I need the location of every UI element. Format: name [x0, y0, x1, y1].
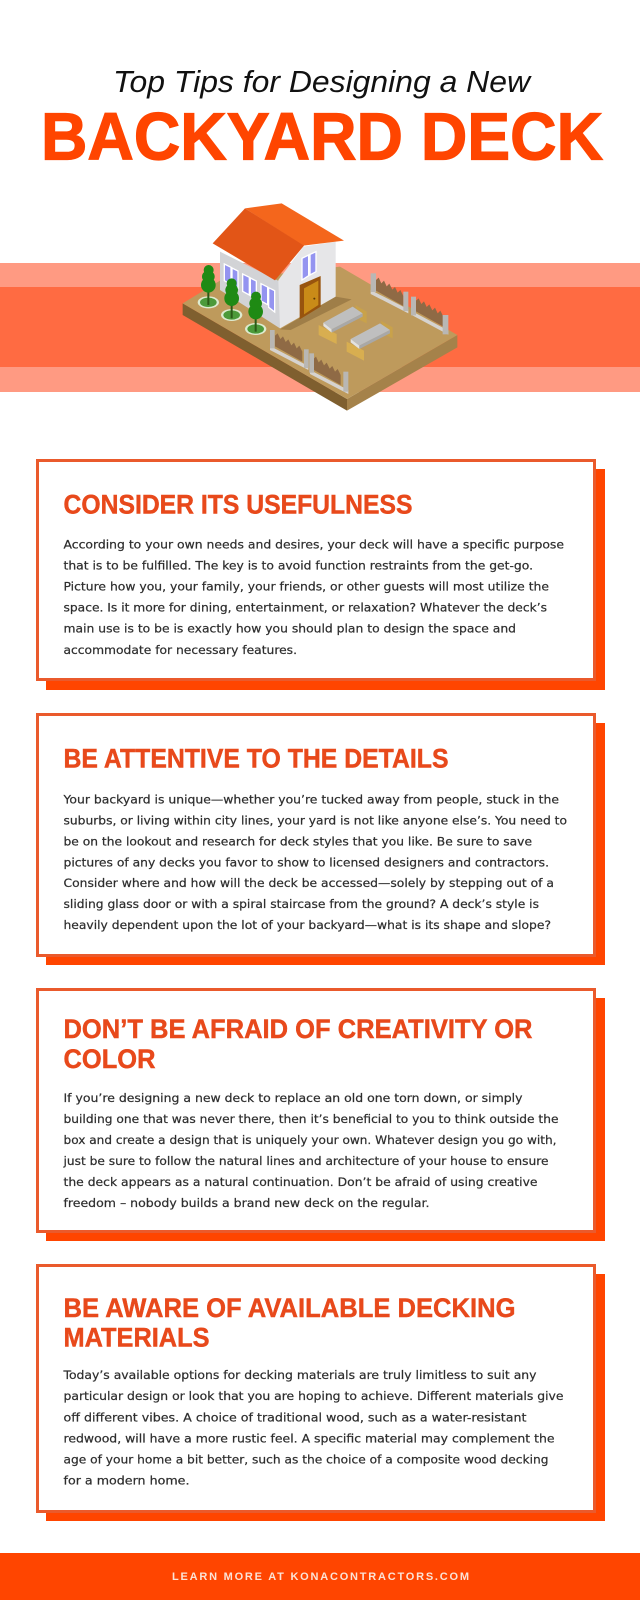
body text: the deck appears as a natural continuation. Don’t be afraid of using creative: [64, 1175, 538, 1189]
body text: [62, 1368, 563, 1488]
panel: be aware of available decking materials: [38, 1266, 605, 1521]
bench tables: [319, 305, 393, 361]
body text: [62, 1091, 558, 1210]
body text: heavily dependent upon the lot of your backyard—what is its shape and slope?: [64, 918, 551, 932]
band: dark stripe: [0, 287, 640, 367]
body text: According to your own needs and desires, your deck will have a specific purpose: [64, 538, 564, 552]
body text: If you’re designing a new deck to replace an old one torn down, or simply: [64, 1091, 523, 1105]
trees: [201, 265, 263, 332]
heading: CONSIDER ITS USEFULNESS: [64, 490, 412, 520]
body text: freedom – nobody builds a brand new deck on the regular.: [64, 1196, 430, 1210]
body text: suburbs, or living within city lines, your yard is not like anyone else’s. You need to: [64, 814, 567, 828]
platform: [183, 267, 457, 411]
main title: BACKYARD DECK: [41, 100, 603, 174]
card box: [38, 714, 594, 956]
body text: sliding glass door or with a spiral staircase from the ground? A deck’s style is: [64, 897, 539, 911]
body text: Picture how you, your family, your friends, or other guests will most utilize the: [64, 580, 549, 594]
body text: space. Is it more for dining, entertainment, or relaxation? Whatever the deck’s: [64, 600, 547, 614]
panel: don't be afraid of creativity or color: [38, 990, 605, 1241]
body text: that is to be fulfilled. The key is to avoid function restraints from the get-go.: [64, 558, 533, 572]
roof: [245, 203, 344, 246]
body text: accommodate for necessary features.: [64, 643, 297, 657]
title: [41, 64, 603, 174]
card box: [38, 990, 594, 1232]
body text: just be sure to follow the natural lines and architecture of your house to ensure: [62, 1154, 548, 1168]
fence: back: [371, 273, 448, 335]
card shadow: [46, 1274, 605, 1521]
heading: BE ATTENTIVE TO THE DETAILS: [64, 744, 448, 774]
body text: [62, 792, 567, 932]
body text: age of your home a bit better, such as the choice of a composite wood decking: [64, 1452, 548, 1466]
body text: [64, 538, 564, 657]
body text: redwood, will have a more rustic feel. A specific material may complement the: [64, 1432, 554, 1446]
footer band: [0, 1553, 640, 1600]
body text: box and create a design that is uniquely your own. Whatever design you go with,: [64, 1133, 556, 1147]
body text: Today’s available options for decking materials are truly limitless to suit any: [62, 1368, 537, 1382]
panel: consider its usefulness: [38, 460, 605, 690]
footer: [0, 1553, 640, 1600]
body text: for a modern home.: [64, 1474, 190, 1488]
door: [300, 276, 321, 319]
body text: main use is to be is exactly how you should plan to design the space and: [64, 622, 516, 636]
card shadow: [46, 723, 605, 965]
band: light stripe: [0, 263, 640, 392]
subtitle: Top Tips for Designing a New: [113, 64, 533, 99]
body text: off different vibes. A choice of traditional wood, such as a water-resistant: [64, 1410, 527, 1424]
card box: [38, 460, 594, 680]
heading: [64, 1293, 516, 1352]
heading: BE AWARE OF AVAILABLE DECKING: [64, 1293, 516, 1323]
fence: front: [270, 330, 348, 394]
body text: Consider where and how will the deck be accessed—solely by stepping out of a: [64, 876, 554, 890]
panel: be attentive to the details: [38, 714, 605, 965]
body text: building one that was never there, then it’s beneficial to you to think outside the: [64, 1112, 558, 1126]
house: [213, 203, 344, 328]
card box: [38, 1266, 594, 1512]
heading: DON’T BE AFRAID OF CREATIVITY OR: [64, 1014, 532, 1044]
heading: COLOR: [64, 1044, 156, 1074]
tree beds: [198, 296, 266, 335]
body text: particular design or look that you are hoping to achieve. Different materials give: [64, 1389, 564, 1403]
house shadow: [280, 297, 352, 330]
heading: MATERIALS: [64, 1322, 210, 1352]
card shadow: [46, 469, 605, 690]
body text: Your backyard is unique—whether you’re tucked away from people, stuck in the: [62, 792, 559, 806]
body text: pictures of any decks you favor to show to licensed designers and contractors.: [64, 856, 549, 870]
body text: be on the lookout and research for deck styles that you like. Be sure to save: [64, 834, 532, 848]
windows: [224, 252, 316, 312]
heading: [64, 1014, 532, 1074]
footer text: LEARN MORE AT KONACONTRACTORS.COM: [172, 1571, 469, 1583]
illustration: isometric house and deck: [183, 203, 457, 411]
card shadow: [46, 998, 605, 1241]
